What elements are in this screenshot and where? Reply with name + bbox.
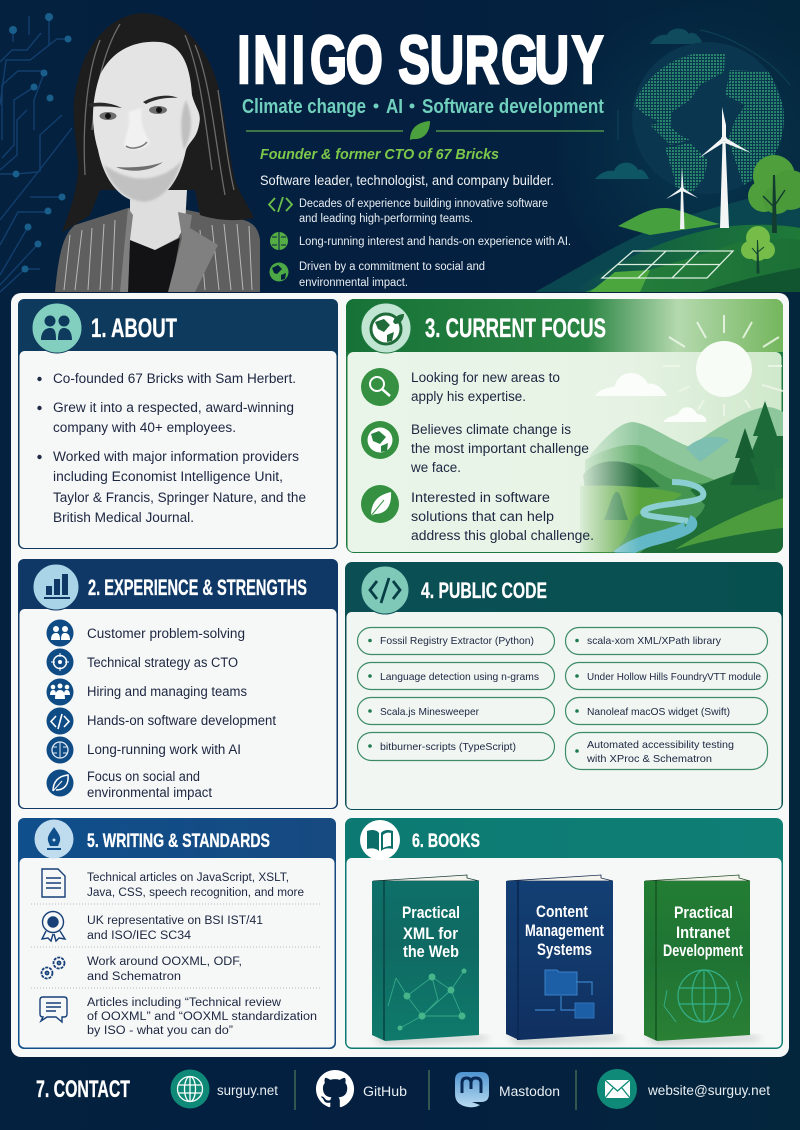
panel: experience and strengths [18,559,338,809]
solar panel [602,251,733,278]
item: impact: environmental impact [87,785,212,800]
item: teams [46,678,247,706]
book: Practical XML for the Web: XML for [403,924,458,943]
heading: 3. CURRENT FOCUS [425,313,606,343]
white content sheet [11,293,789,1057]
item: code [46,708,276,734]
icon: bar chart [33,564,79,610]
bullet list: including Economist Intelligence Unit, [53,469,283,484]
item: formats [42,956,242,983]
item: impact: Focus on social and [87,769,200,784]
panel: contact [36,1069,770,1110]
bullet list: Grew it into a respected, award-winning [53,400,294,415]
bullet list: Co-founded 67 Bricks with Sam Herbert. [53,371,296,386]
code link labels: Automated accessibility testing [587,739,734,751]
item: search: Looking for new areas to [411,370,560,385]
panel: writing and standards [18,818,336,1049]
subtitle: Climate change [242,96,366,118]
heading: 7. CONTACT [36,1076,130,1103]
hills [535,190,800,292]
bullet list: company with 40+ employees. [53,420,236,435]
item: articles: Technical articles on JavaScript, XSLT, [87,872,289,884]
globe [632,42,785,205]
link: website: surguy.net [217,1083,278,1098]
item: teams: Hiring and managing teams [87,684,247,699]
panel: current focus [346,299,783,556]
heading: 6. BOOKS [412,831,480,852]
link: website [170,1070,278,1108]
item: globe: Believes climate change is [411,422,571,437]
intro point: experience: Decades of experience building innovative software [299,198,548,210]
item: search [361,368,560,406]
code link labels [380,635,761,765]
wind turbine: small [666,167,698,229]
link: Mastodon: Mastodon [499,1084,560,1099]
item: search: apply his expertise. [411,389,526,404]
tagline: Software leader, technologist, and company builder. [260,172,554,188]
item: AI [46,736,241,764]
item: articles: Java, CSS, speech recognition, and more [87,887,304,899]
intro point: AI [270,232,571,250]
item: code: Hands-on software development [87,713,276,728]
item: strategy: Technical strategy as CTO [87,655,238,670]
item: standards rep: UK representative on BSI IST/41 [87,915,263,927]
tree: small [741,226,775,273]
panel: about [18,299,338,549]
code link labels: with XProc & Schematron [586,753,712,765]
brows, eyes, nose, mouth [88,96,178,171]
shirt [128,238,180,292]
icon: pen nib [34,820,74,858]
item: globe: we face. [410,460,461,475]
face [93,42,200,203]
code link labels: Nanoleaf macOS widget (Swift) [587,706,730,718]
item: standards rep: and ISO/IEC SC34 [87,930,192,942]
divider with leaf [246,121,604,140]
bullet list [37,371,306,525]
book: Practical Intranet Development: Practical [674,903,733,922]
item: leaf: solutions that can help [411,509,554,524]
title: INIGO SURGUY [237,23,604,98]
code link labels: Under Hollow Hills FoundryVTT module [587,671,761,683]
subtitle [242,96,604,118]
link: email: website@surguy.net [647,1083,770,1098]
book: Content Management Systems: Systems [537,940,592,959]
role: Founder & former CTO of 67 Bricks [260,146,499,163]
bullet list: British Medical Journal. [53,510,194,525]
item: publications: Articles including “Technical review [87,997,282,1009]
code link labels: scala-xom XML/XPath library [587,635,722,647]
wind turbine: large [699,107,751,228]
bullet list: Taylor & Francis, Springer Nature, and the [53,490,306,505]
item: impact [46,769,212,800]
book: Content Management Systems: Content [536,902,588,921]
panel: books [345,818,783,1049]
item: leaf: Interested in software [411,490,550,505]
book: Practical Intranet Development [644,875,750,1041]
icon: people [32,303,82,353]
code link labels: Fossil Registry Extractor (Python) [380,635,534,647]
item: publications: by ISO - what you can do” [87,1025,233,1037]
intro point: impact [270,261,485,289]
item: customers [46,620,245,646]
item: articles [42,869,304,899]
illustration: mountains and river [580,401,783,556]
intro point: experience: and leading high-performing teams. [299,213,473,225]
item: leaf [361,485,594,543]
intro point: impact: Driven by a commitment to social and [299,261,485,273]
heading: 1. ABOUT [91,313,177,343]
book: Practical Intranet Development: Development [663,941,743,960]
item: globe: the most important challenge [411,441,589,456]
circuit pattern [0,13,72,292]
item: formats: Work around OOXML, ODF, [87,956,242,968]
item: publications: of OOXML” and “OOXML standardization [87,1011,317,1023]
heading: 4. PUBLIC CODE [421,578,547,603]
intro point: impact: environmental impact. [299,277,408,289]
book: Practical XML for the Web: the Web [403,942,459,961]
code link labels: Scala.js Minesweeper [380,706,479,718]
item: globe [361,421,589,475]
link: Mastodon [455,1072,560,1107]
code link pills [358,628,768,770]
link: email [597,1069,770,1109]
bullet list: Worked with major information providers [53,449,299,464]
book: Practical XML for the Web: Practical [402,903,460,922]
lapel [120,208,218,292]
book shadows [372,1036,762,1044]
icon: cloud [650,28,703,44]
item: formats: and Schematron [87,971,181,983]
item: strategy [46,648,238,676]
subtitle: AI [386,96,403,118]
icon: open book [360,820,400,860]
icon: code brackets [361,566,409,614]
link: GitHub: GitHub [363,1084,407,1099]
intro point: experience [269,197,548,225]
link: GitHub [316,1070,407,1107]
code link labels: Language detection using n-grams [380,671,539,683]
neck [130,190,187,250]
tree: large [748,155,800,233]
item: standards rep [42,912,263,942]
item: customers: Customer problem-solving [87,626,245,641]
book: Content Management Systems [506,875,613,1040]
icon: globe leaf [361,303,411,353]
intro point: AI: Long-running interest and hands-on experience with AI. [299,236,571,248]
heading: 2. EXPERIENCE & STRENGTHS [88,575,307,600]
item: leaf: address this global challenge. [411,528,594,543]
item: publications [40,997,317,1037]
portrait [55,13,260,292]
panel: public code [345,562,783,810]
landscape: globe, wind turbines, hills [535,28,800,292]
item: AI: Long-running work with AI [87,742,241,757]
book: Practical XML for the Web [372,875,479,1041]
hair [62,13,254,232]
code link labels: bitburner-scripts (TypeScript) [380,741,516,753]
illustration: sun and clouds [595,315,783,422]
heading: 5. WRITING & STANDARDS [87,831,270,852]
subtitle: Software development [422,96,604,118]
jacket [55,208,260,292]
book: Practical Intranet Development: Intranet [676,923,730,942]
book: Content Management Systems: Management [525,921,604,940]
